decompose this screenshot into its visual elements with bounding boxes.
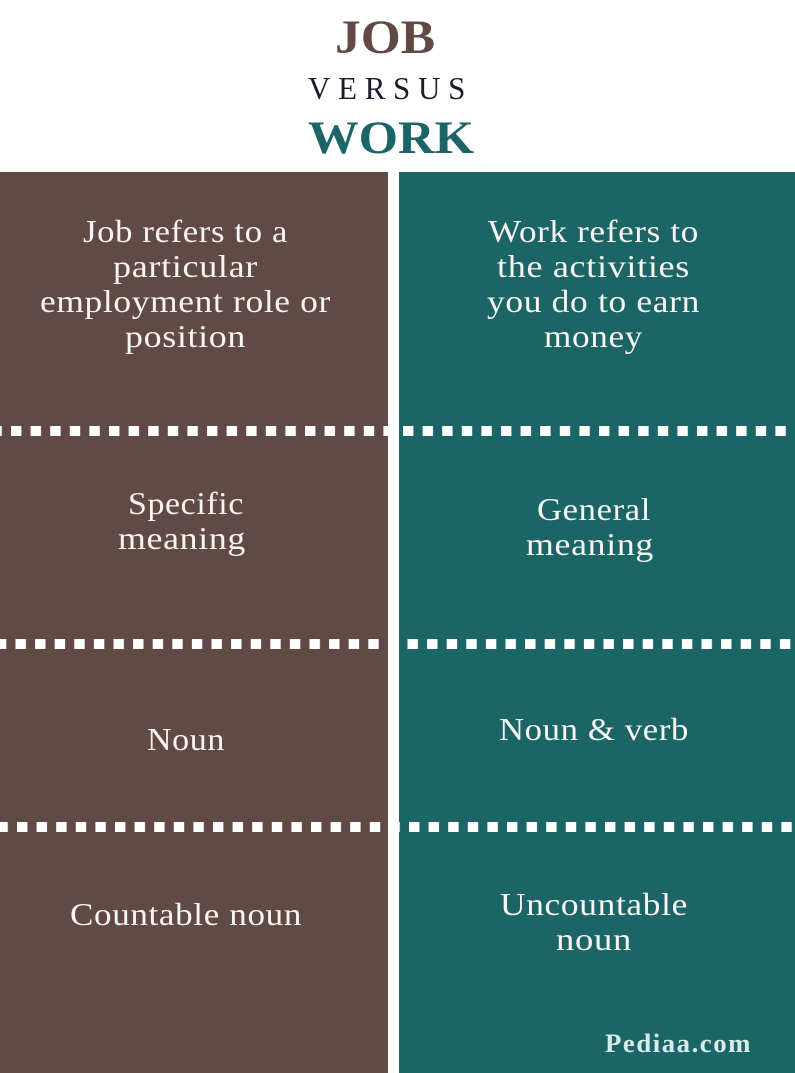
- title word: versus: VERSUS: [308, 70, 473, 106]
- text: work definition: money: [544, 318, 643, 354]
- text: work countability: noun: [556, 921, 632, 957]
- text: work meaning: General: [537, 491, 651, 527]
- text: job meaning: meaning: [118, 520, 246, 556]
- text: job definition: Job refers to a: [83, 213, 288, 249]
- text: job meaning: [118, 485, 246, 556]
- text: work definition: the activities: [497, 248, 690, 284]
- text: work definition: Work refers to: [488, 213, 699, 249]
- text: job definition: position: [125, 318, 246, 354]
- text: work countability: [500, 886, 688, 957]
- panel: job: [0, 172, 388, 1073]
- title: [308, 11, 474, 164]
- panel: work: [399, 172, 795, 1073]
- text: job part of speech: Noun: [147, 721, 225, 757]
- text: work meaning: meaning: [526, 526, 654, 562]
- logo: pediaa.com: Pediaa.com: [605, 1029, 752, 1058]
- text: job definition: employment role or: [40, 283, 331, 319]
- text: job meaning: Specific: [128, 485, 244, 521]
- title word: work: WORK: [308, 112, 474, 164]
- text: work definition: [487, 213, 700, 354]
- title word: job: JOB: [335, 11, 435, 64]
- text: work definition: you do to earn: [487, 283, 700, 319]
- text: job countability: Countable noun: [70, 896, 302, 932]
- text: job definition: [40, 213, 331, 354]
- text: work meaning: [526, 491, 654, 562]
- text: work countability: Uncountable: [500, 886, 688, 922]
- text: job definition: particular: [113, 248, 258, 284]
- text: work part of speech: Noun & verb: [499, 711, 689, 747]
